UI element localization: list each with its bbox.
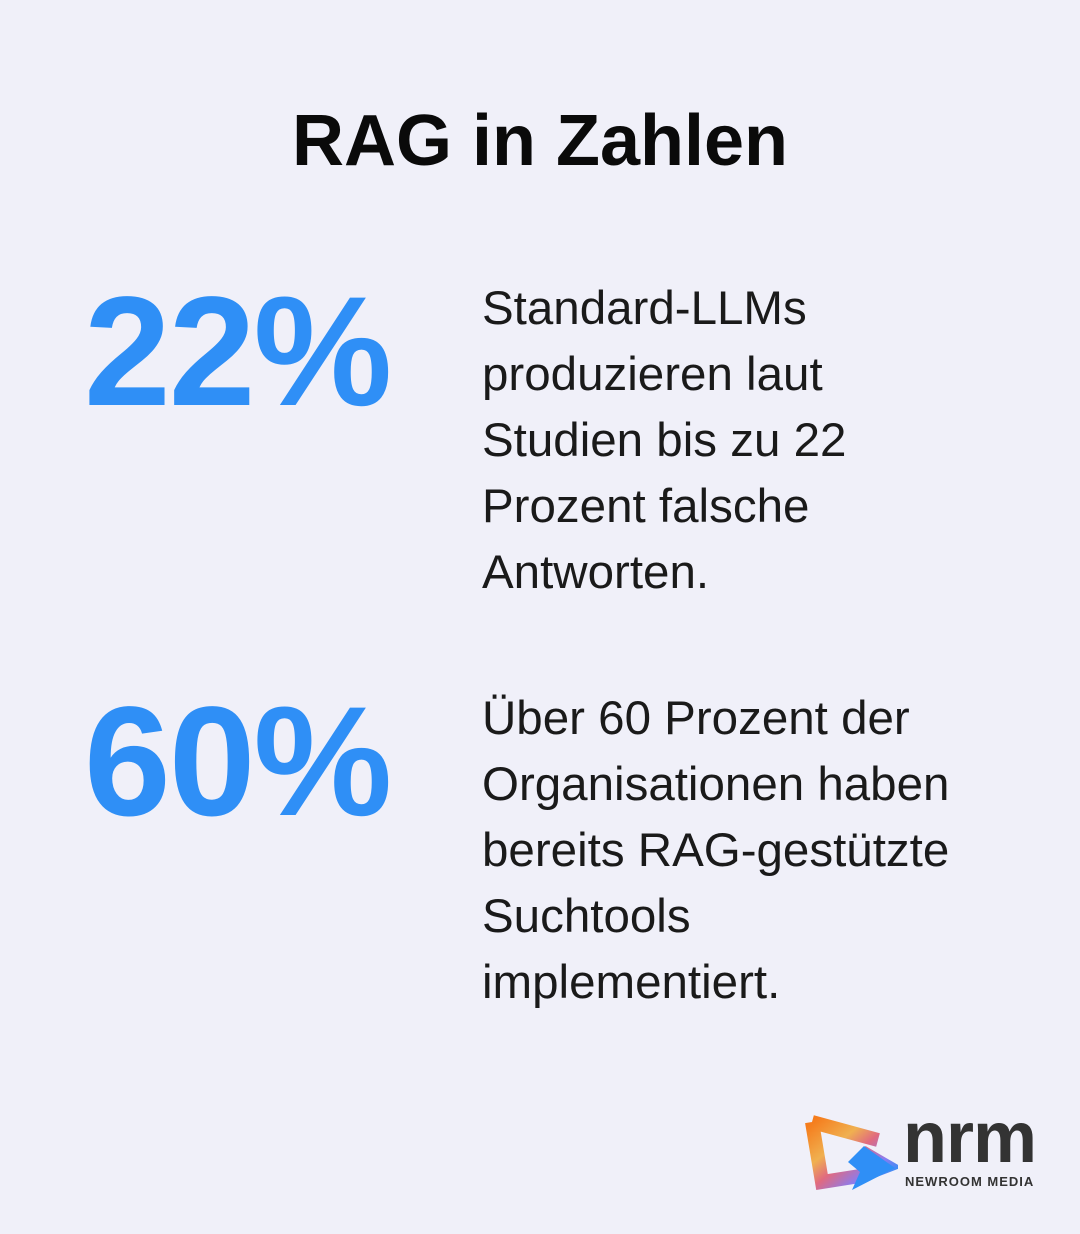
stat 1 text: Standard-LLMs produzieren laut Studien bis zu 22 Prozent falsche Antworten. bbox=[482, 282, 846, 599]
logo text: nrm bbox=[903, 1098, 1036, 1178]
stat 2 number: 60% bbox=[84, 675, 390, 849]
title: RAG in Zahlen bbox=[292, 101, 788, 181]
logo icon bbox=[805, 1115, 898, 1190]
logo: NEWROOM MEDIA bbox=[905, 1174, 1034, 1189]
stat 1 number: 22% bbox=[84, 265, 390, 439]
logo bbox=[805, 1098, 1036, 1190]
stat 2 text: Über 60 Prozent der Organisationen haben bereits RAG-gestützte Suchtools implementiert. bbox=[482, 692, 949, 1009]
